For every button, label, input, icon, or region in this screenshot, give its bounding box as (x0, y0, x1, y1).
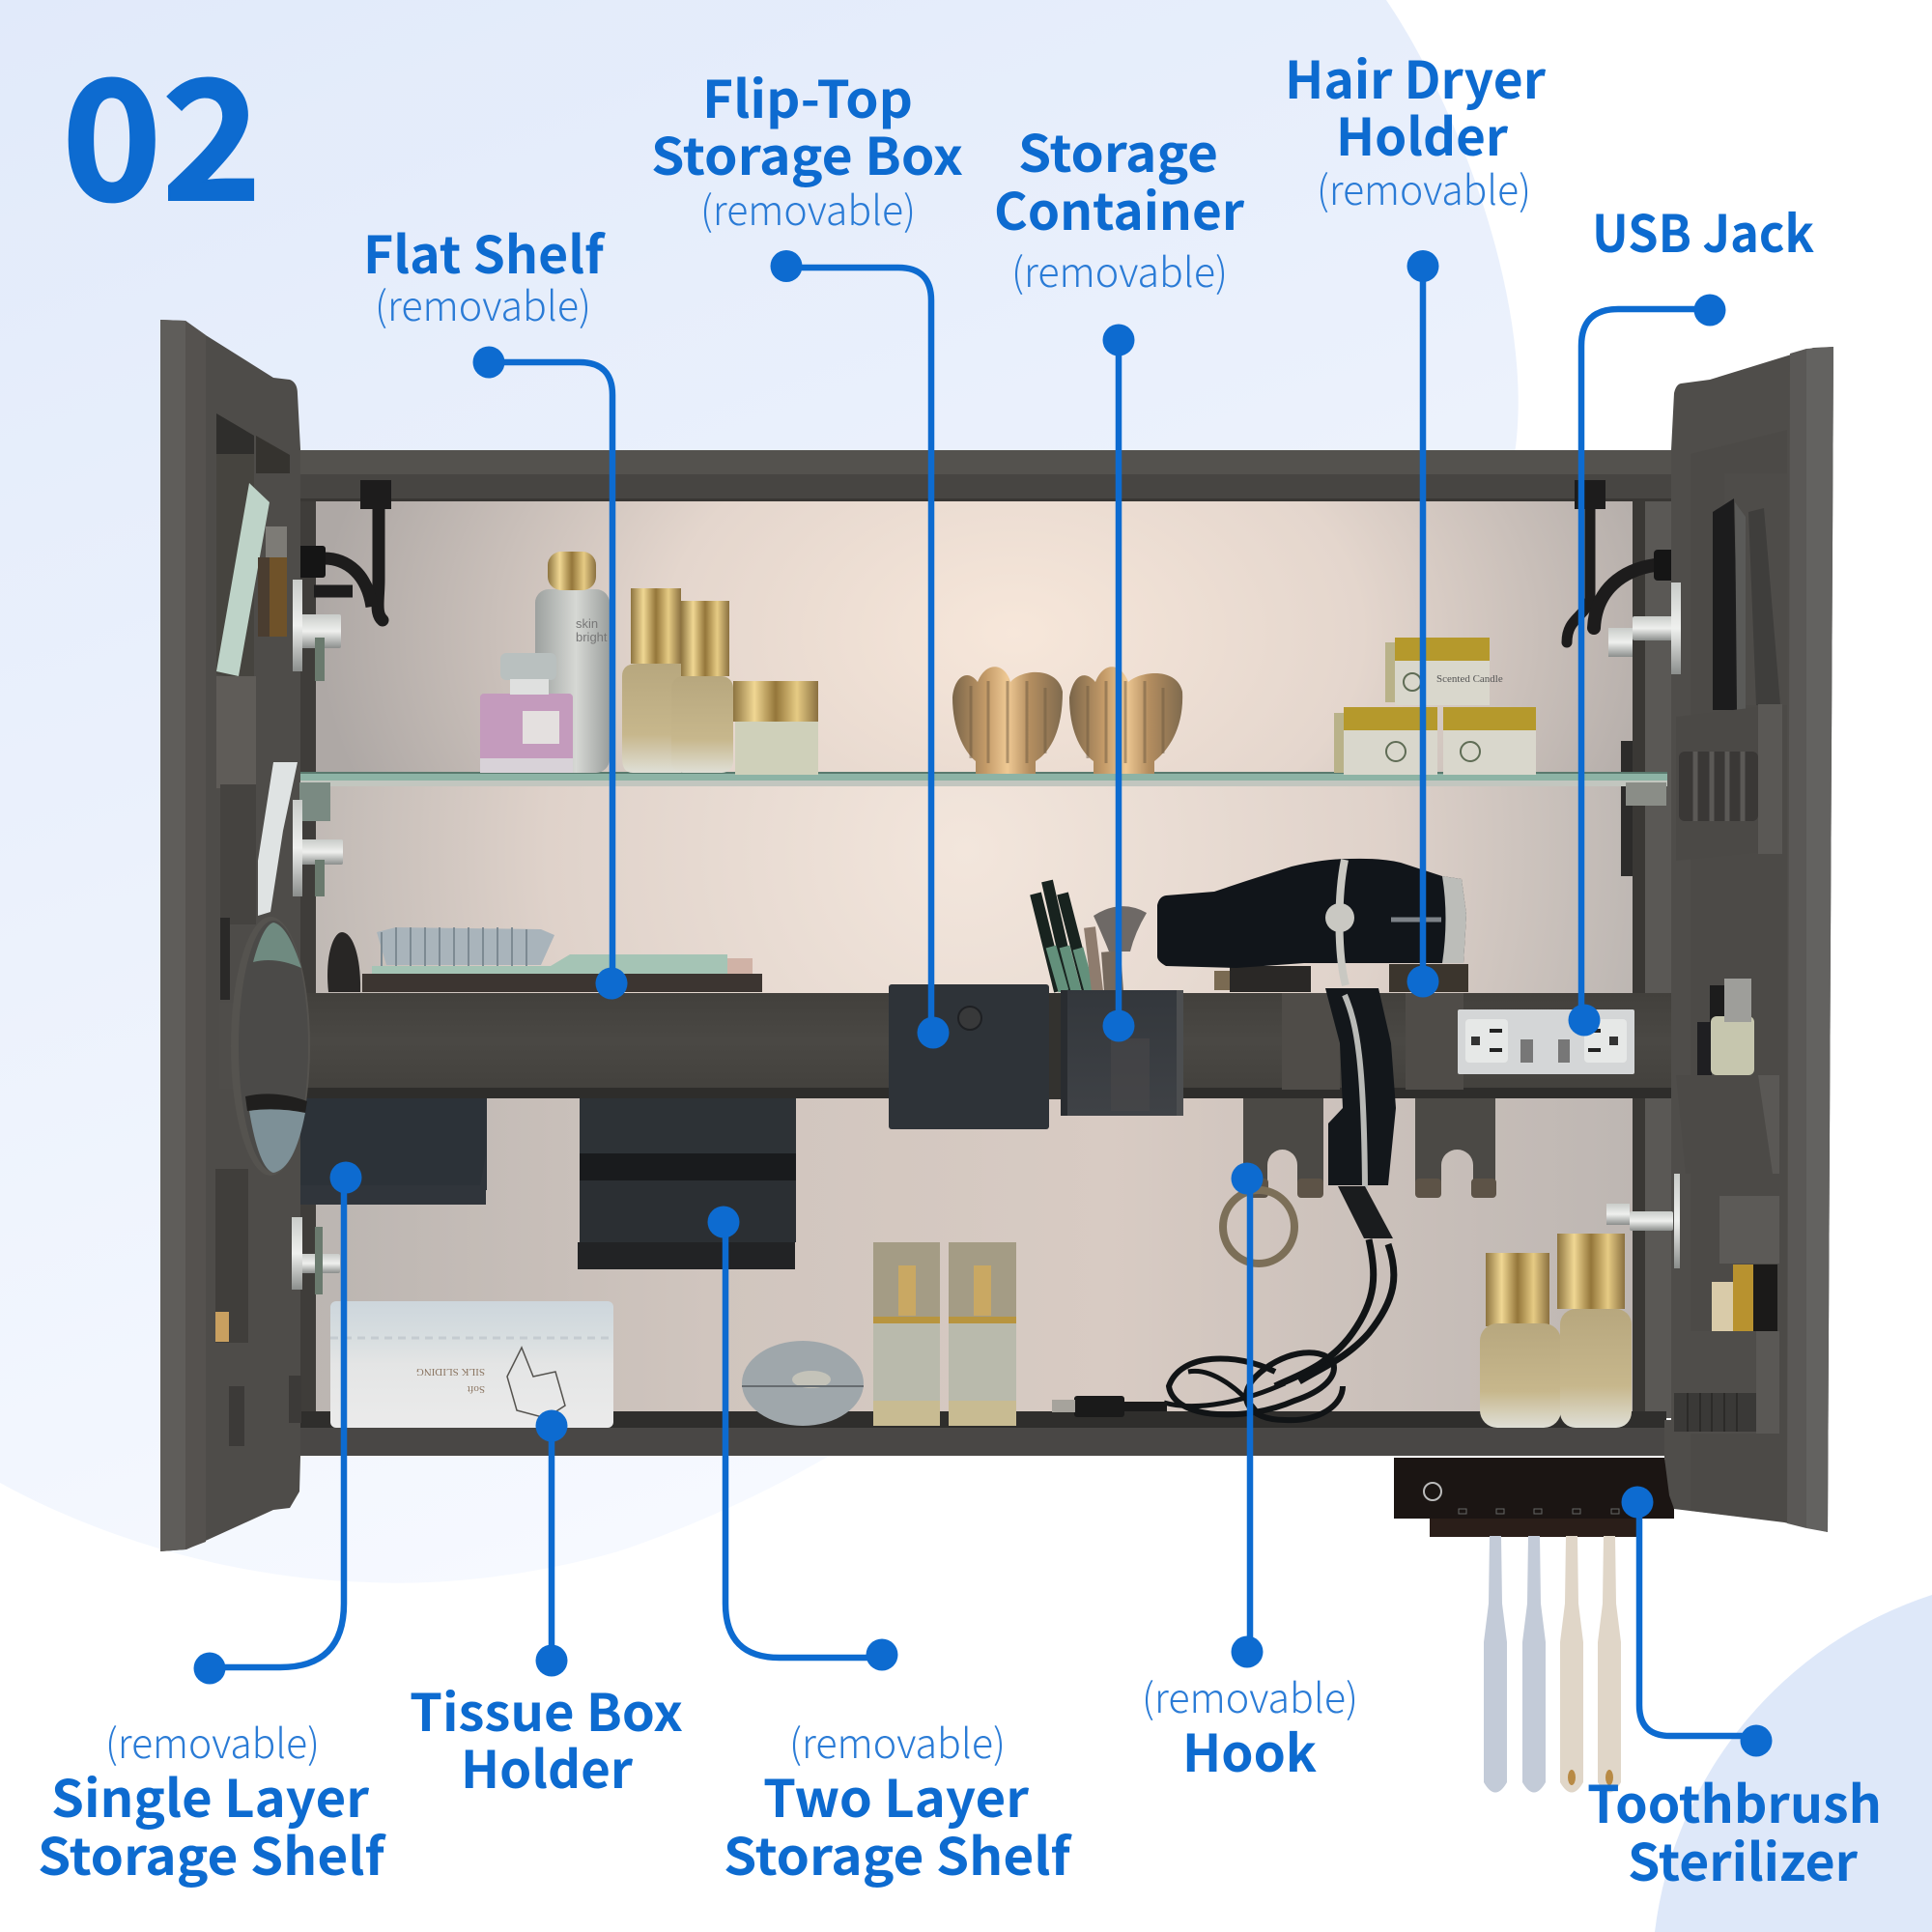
callout: flat shelf (363, 215, 628, 999)
lower recess (215, 1169, 248, 1343)
strain relief (1338, 1186, 1393, 1238)
LED gooseneck left (292, 480, 391, 620)
round mirror (219, 917, 310, 1176)
comb (1713, 498, 1780, 710)
left door (160, 320, 310, 1551)
hair dryer (1052, 859, 1466, 1420)
callout: tissue box holder: Tissue Box (410, 1673, 683, 1747)
callout: hair dryer holder (1285, 41, 1547, 997)
callout: USB jack: USB Jack (1592, 194, 1814, 268)
hair tie (1223, 1190, 1294, 1264)
crystal top bottles (873, 1242, 1016, 1426)
hair dryer holder block (1214, 964, 1468, 992)
toothbrushes (1484, 1536, 1621, 1793)
plug (1074, 1396, 1124, 1417)
hinges left (292, 580, 343, 1294)
callout: single layer storage shelf: Single Layer (51, 1759, 370, 1833)
callout: two layer storage shelf: Two Layer (763, 1759, 1030, 1833)
hinges right (1606, 582, 1681, 1268)
lotion bottle: skin (576, 616, 598, 631)
middle pocket and items (1676, 979, 1779, 1174)
callout: two layer storage shelf: (removable) (789, 1712, 1006, 1771)
tissue pack (330, 1301, 613, 1428)
cosmetic items in upper pocket (258, 526, 287, 637)
top pocket (1676, 704, 1782, 861)
callout: hair dryer holder: Holder (1336, 98, 1509, 171)
lower pocket and items (1674, 1264, 1779, 1434)
callout: USB jack (1569, 194, 1814, 1036)
tissue pack: SILK SLIDING (416, 1366, 485, 1378)
top frame (295, 450, 1676, 501)
callout: single layer storage shelf: (removable) (105, 1712, 320, 1771)
upper recess (216, 413, 254, 682)
paper sachets (216, 483, 270, 676)
hooks (1243, 1098, 1496, 1198)
cabinet (160, 320, 1833, 1793)
callout: two layer storage shelf (707, 1206, 1072, 1890)
callout: flat shelf: Flat Shelf (363, 215, 606, 289)
callout: hook (1142, 1163, 1358, 1787)
middle bar (300, 993, 1671, 1098)
scented candles (1334, 638, 1536, 775)
callout: tissue box holder (410, 1410, 683, 1804)
hairbrush (372, 927, 753, 974)
handle (1325, 988, 1396, 1185)
interior mirror back (300, 497, 1671, 1420)
cord (1164, 1239, 1394, 1420)
lotion bottle: bright (576, 630, 608, 644)
callout: single layer storage shelf: Storage Shelf (38, 1817, 386, 1890)
callout: storage container: Storage (1018, 114, 1218, 187)
callout: flip-top storage box: (removable) (700, 179, 916, 238)
power strip with USB jack (1458, 1009, 1634, 1074)
gold-cap bottles lower right (1480, 1234, 1632, 1428)
callout: flip-top storage box (651, 60, 963, 1049)
callout: hair dryer holder: (removable) (1317, 158, 1531, 217)
left hook (1243, 1098, 1323, 1198)
callout: toothbrush sterilizer: Sterilizer (1628, 1823, 1859, 1896)
callout: hook: Hook (1182, 1714, 1317, 1787)
callout: storage container (994, 114, 1245, 1041)
callout: flip-top storage box: Flip-Top (702, 60, 913, 133)
scented candles: Scented Candle (1436, 673, 1503, 685)
callout: hair dryer holder: Hair Dryer (1285, 41, 1547, 114)
callout: tissue box holder: Holder (461, 1730, 634, 1804)
callout: flip-top storage box: Storage Box (651, 117, 963, 190)
callout: single layer storage shelf (38, 1161, 386, 1890)
callout: hook: (removable) (1142, 1666, 1358, 1725)
callout: storage container: (removable) (1011, 241, 1228, 299)
two layer storage shelf (578, 1098, 796, 1269)
toothbrush sterilizer (1394, 1458, 1674, 1793)
middle pocket (216, 676, 256, 788)
flip-top storage box (889, 984, 1062, 1129)
silver round box (742, 1341, 864, 1426)
gold bottles (622, 588, 733, 773)
callout: toothbrush sterilizer (1587, 1486, 1882, 1896)
glass shelf (299, 772, 1667, 786)
bottom shelf (300, 1411, 1666, 1456)
single layer storage shelf (300, 1098, 487, 1205)
callout: two layer storage shelf: Storage Shelf (724, 1817, 1072, 1890)
tissue pack: Soft (468, 1383, 485, 1395)
storage container (1061, 990, 1183, 1116)
LED gooseneck right (1567, 480, 1690, 642)
body (1157, 859, 1466, 968)
perfume (480, 653, 573, 773)
callout: toothbrush sterilizer: Toothbrush (1587, 1765, 1882, 1838)
white strap and knob (1339, 860, 1346, 985)
glass candle holders (952, 667, 1182, 774)
callout: storage container: Container (994, 172, 1245, 245)
flat shelf with items (327, 927, 762, 992)
right door (1664, 347, 1833, 1532)
number 02: 02 (62, 7, 262, 248)
cream jar (733, 681, 818, 775)
lotion bottle (535, 552, 610, 773)
callout: flat shelf: (removable) (375, 274, 591, 333)
right hook (1415, 1098, 1496, 1198)
makeup brushes (1036, 881, 1147, 991)
perfume and lotion bottles (480, 552, 818, 775)
